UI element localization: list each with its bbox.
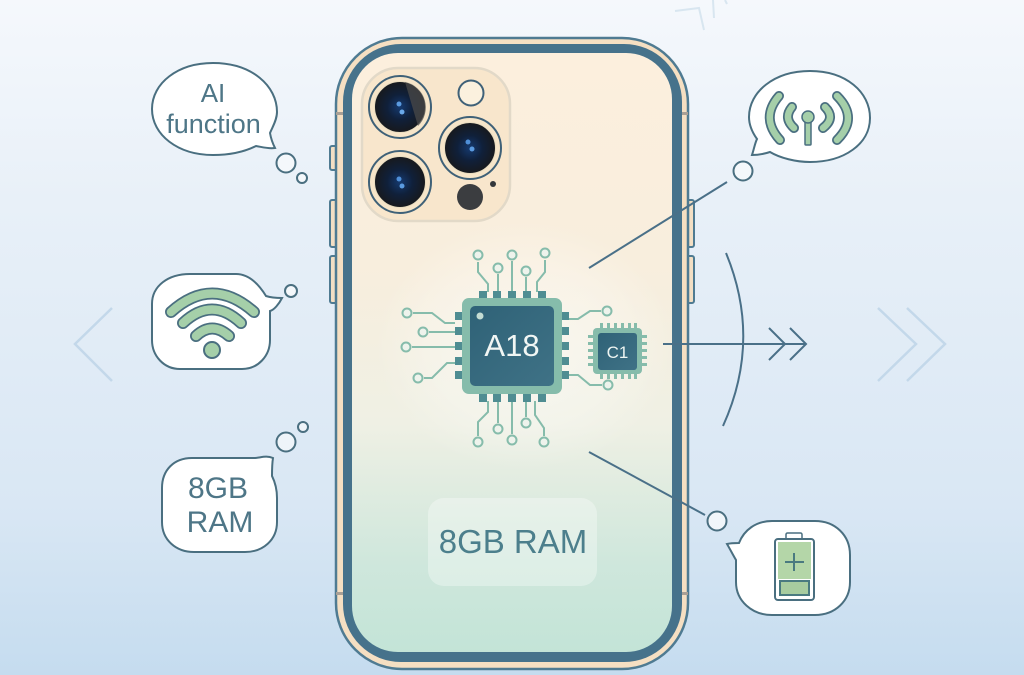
thought dots: RAM — [276, 422, 308, 452]
bubble: antenna — [749, 71, 870, 162]
right faint double chevron — [878, 308, 945, 381]
thought dot: wifi — [285, 285, 297, 297]
left faint chevron — [75, 308, 112, 381]
camera module — [362, 68, 510, 221]
bubble: 8GB RAM: RAM — [187, 506, 253, 539]
side buttons — [330, 146, 694, 303]
bubble: battery — [727, 521, 850, 615]
bubble: AI function: function — [166, 109, 261, 139]
8GB RAM text: 8GB — [188, 472, 248, 505]
connector line to antenna bubble — [589, 182, 727, 268]
thought dot: antenna — [734, 162, 752, 180]
A18 chip — [455, 291, 569, 402]
dark inner band — [343, 44, 682, 662]
curved arc — [723, 253, 743, 426]
signal arrow — [663, 328, 806, 360]
C1 pins — [588, 323, 647, 379]
thought dots: AI — [276, 154, 307, 183]
icon: wifi — [171, 294, 254, 358]
bubble: 8GB RAM — [162, 457, 277, 552]
circuit traces — [402, 248, 612, 446]
flash — [458, 80, 484, 106]
chip pins — [455, 291, 569, 402]
C1 label: C1 — [607, 343, 628, 362]
AI function text: AI — [201, 78, 225, 108]
icon: antenna — [770, 96, 848, 145]
bubble: AI function — [152, 63, 277, 155]
C1 chip — [588, 323, 647, 379]
connector line to battery bubble — [589, 452, 705, 515]
phone back panel — [352, 53, 672, 652]
microphone dot — [490, 181, 496, 187]
lens bottom left — [369, 151, 431, 213]
RAM label: 8GB RAM — [439, 523, 587, 560]
lens right — [439, 117, 501, 179]
bubble: wifi — [152, 274, 282, 369]
decorative top chevrons — [675, 0, 727, 30]
icon: battery — [775, 533, 814, 600]
phone — [330, 38, 694, 669]
A18 label: A18 — [484, 328, 540, 363]
thought dot: battery — [708, 512, 726, 530]
chip glow — [375, 221, 675, 471]
lens top left — [369, 76, 431, 138]
sensor — [457, 184, 483, 210]
phone frame — [336, 38, 688, 669]
antenna lines — [336, 112, 688, 595]
RAM panel — [428, 498, 597, 586]
